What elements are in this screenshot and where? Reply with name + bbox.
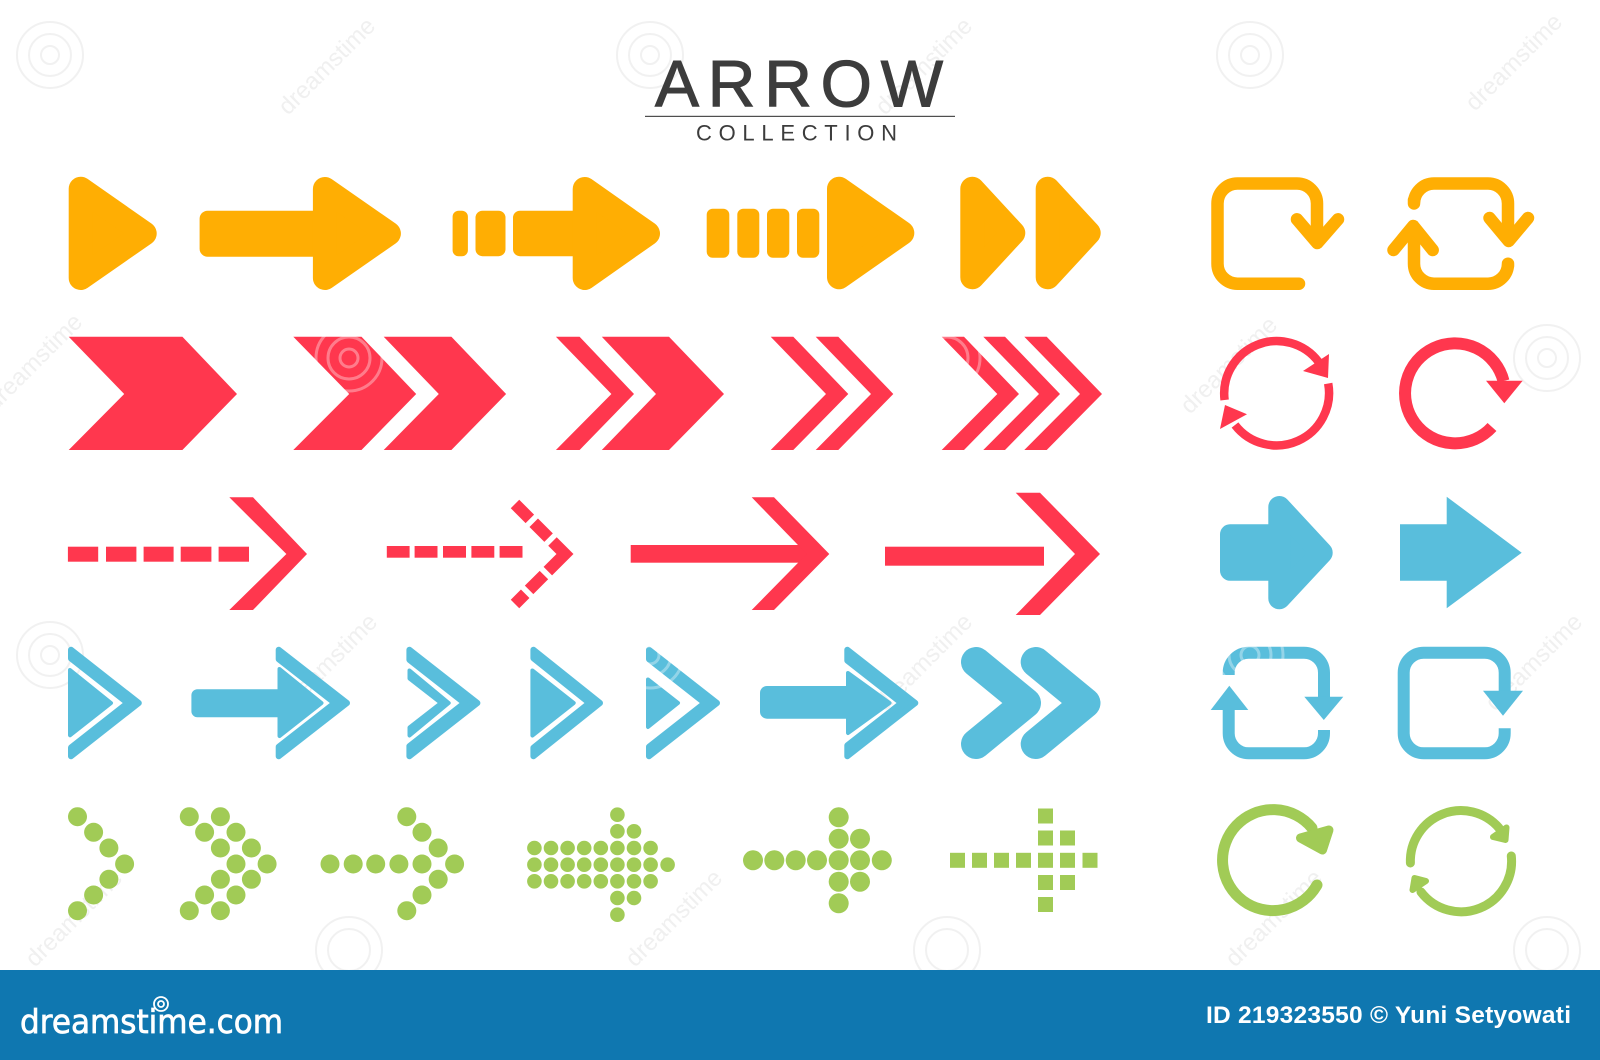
title (645, 46, 955, 146)
icon: green small dots block arrow (527, 807, 675, 922)
icon: red solid arrow (631, 497, 829, 610)
row 5: green dotted arrows (68, 807, 1098, 922)
watermark background: dreamstime (870, 608, 978, 716)
icon: orange single loop (1218, 184, 1338, 284)
icon: blue triangle with chevron, second (532, 650, 600, 756)
row 2 right: red circular arrows (1220, 341, 1523, 445)
icon: orange arrow with two bars (453, 189, 648, 278)
row 3 right: blue block arrows (1220, 497, 1522, 608)
icon: small red fully dashed arrow (387, 504, 565, 604)
icon: red dashed arrow with solid head (68, 497, 307, 610)
watermark background: dreamstime (1175, 311, 1283, 419)
icon: double thick red chevron (293, 337, 506, 450)
icon: blue single loop (1404, 653, 1523, 753)
icon: green dotted chevron (68, 807, 134, 920)
title divider line (645, 116, 955, 117)
watermark background: dreamstime (870, 12, 978, 120)
heading: ARROW: ARROW (655, 46, 944, 120)
icon: orange double triangle (972, 189, 1089, 277)
icon: green double dotted chevron (180, 807, 277, 920)
row 4: blue chevron arrows (70, 650, 1086, 756)
icon: rounded blue arrow (1220, 507, 1322, 598)
footer bar (0, 970, 1600, 1060)
icon: thin and thick red chevron (556, 337, 724, 450)
icon: blue long arrow with chevron (191, 650, 347, 756)
row 5 right: green circular arrows (1223, 810, 1512, 912)
icon: three thin red chevrons (942, 337, 1102, 450)
watermark background: dreamstime (273, 12, 381, 120)
watermark background: dreamstime (1220, 864, 1328, 972)
watermark background: dreamstime (20, 864, 128, 972)
icon: orange long arrow (200, 189, 389, 278)
icon: blue thick arrow with chevron (760, 650, 915, 756)
watermark background: dreamstime (1460, 8, 1568, 116)
icon: blue double loop (1211, 653, 1343, 753)
watermark background: dreamstime (1480, 608, 1588, 716)
icon: green dotted line arrow (320, 807, 464, 920)
row 3: red line arrows (68, 493, 1100, 615)
watermark background: dreamstime (275, 608, 383, 716)
footer logo: dreamstime.com: dreamstime.com (20, 1002, 283, 1041)
icon: red double circular arrows (1220, 341, 1329, 445)
icon: green big dots arrow (743, 807, 892, 913)
footer credit: ID 219323550 © Yuni Setyowati (1206, 1002, 1571, 1029)
icon: blue double line chevron (409, 650, 477, 756)
icon: logo spiral (154, 997, 168, 1011)
icon: sharp blue arrow (1400, 497, 1522, 608)
row 4 right: blue loop icons (1211, 653, 1523, 753)
icon: single red chevron (69, 337, 237, 450)
icon: blue triangle with chevron (70, 650, 139, 756)
icon: blue thick rounded double chevron (976, 662, 1086, 744)
icon: red long arrow with gap (885, 493, 1100, 615)
icon: orange double loop (1394, 184, 1528, 284)
icon: green square dots arrow (950, 808, 1098, 912)
icon: orange arrow with four bars (707, 189, 902, 277)
icon: blue small triangle with chevron (648, 650, 717, 756)
subheading: COLLECTION: COLLECTION (696, 120, 897, 146)
icon: orange triangle (81, 189, 145, 278)
icon: two thin red chevrons (771, 337, 893, 450)
icon: green double circular arrows (1410, 811, 1512, 912)
icon: red single circular arrow (1405, 343, 1523, 443)
watermark overlay on icons (316, 325, 1283, 688)
icon: green single circular arrow (1223, 810, 1329, 911)
row 2: red chevrons (69, 337, 1102, 450)
row 1: orange solid arrows (81, 189, 1089, 278)
watermark background: dreamstime (620, 864, 728, 972)
row 1 right: orange loop icons (1218, 184, 1528, 284)
